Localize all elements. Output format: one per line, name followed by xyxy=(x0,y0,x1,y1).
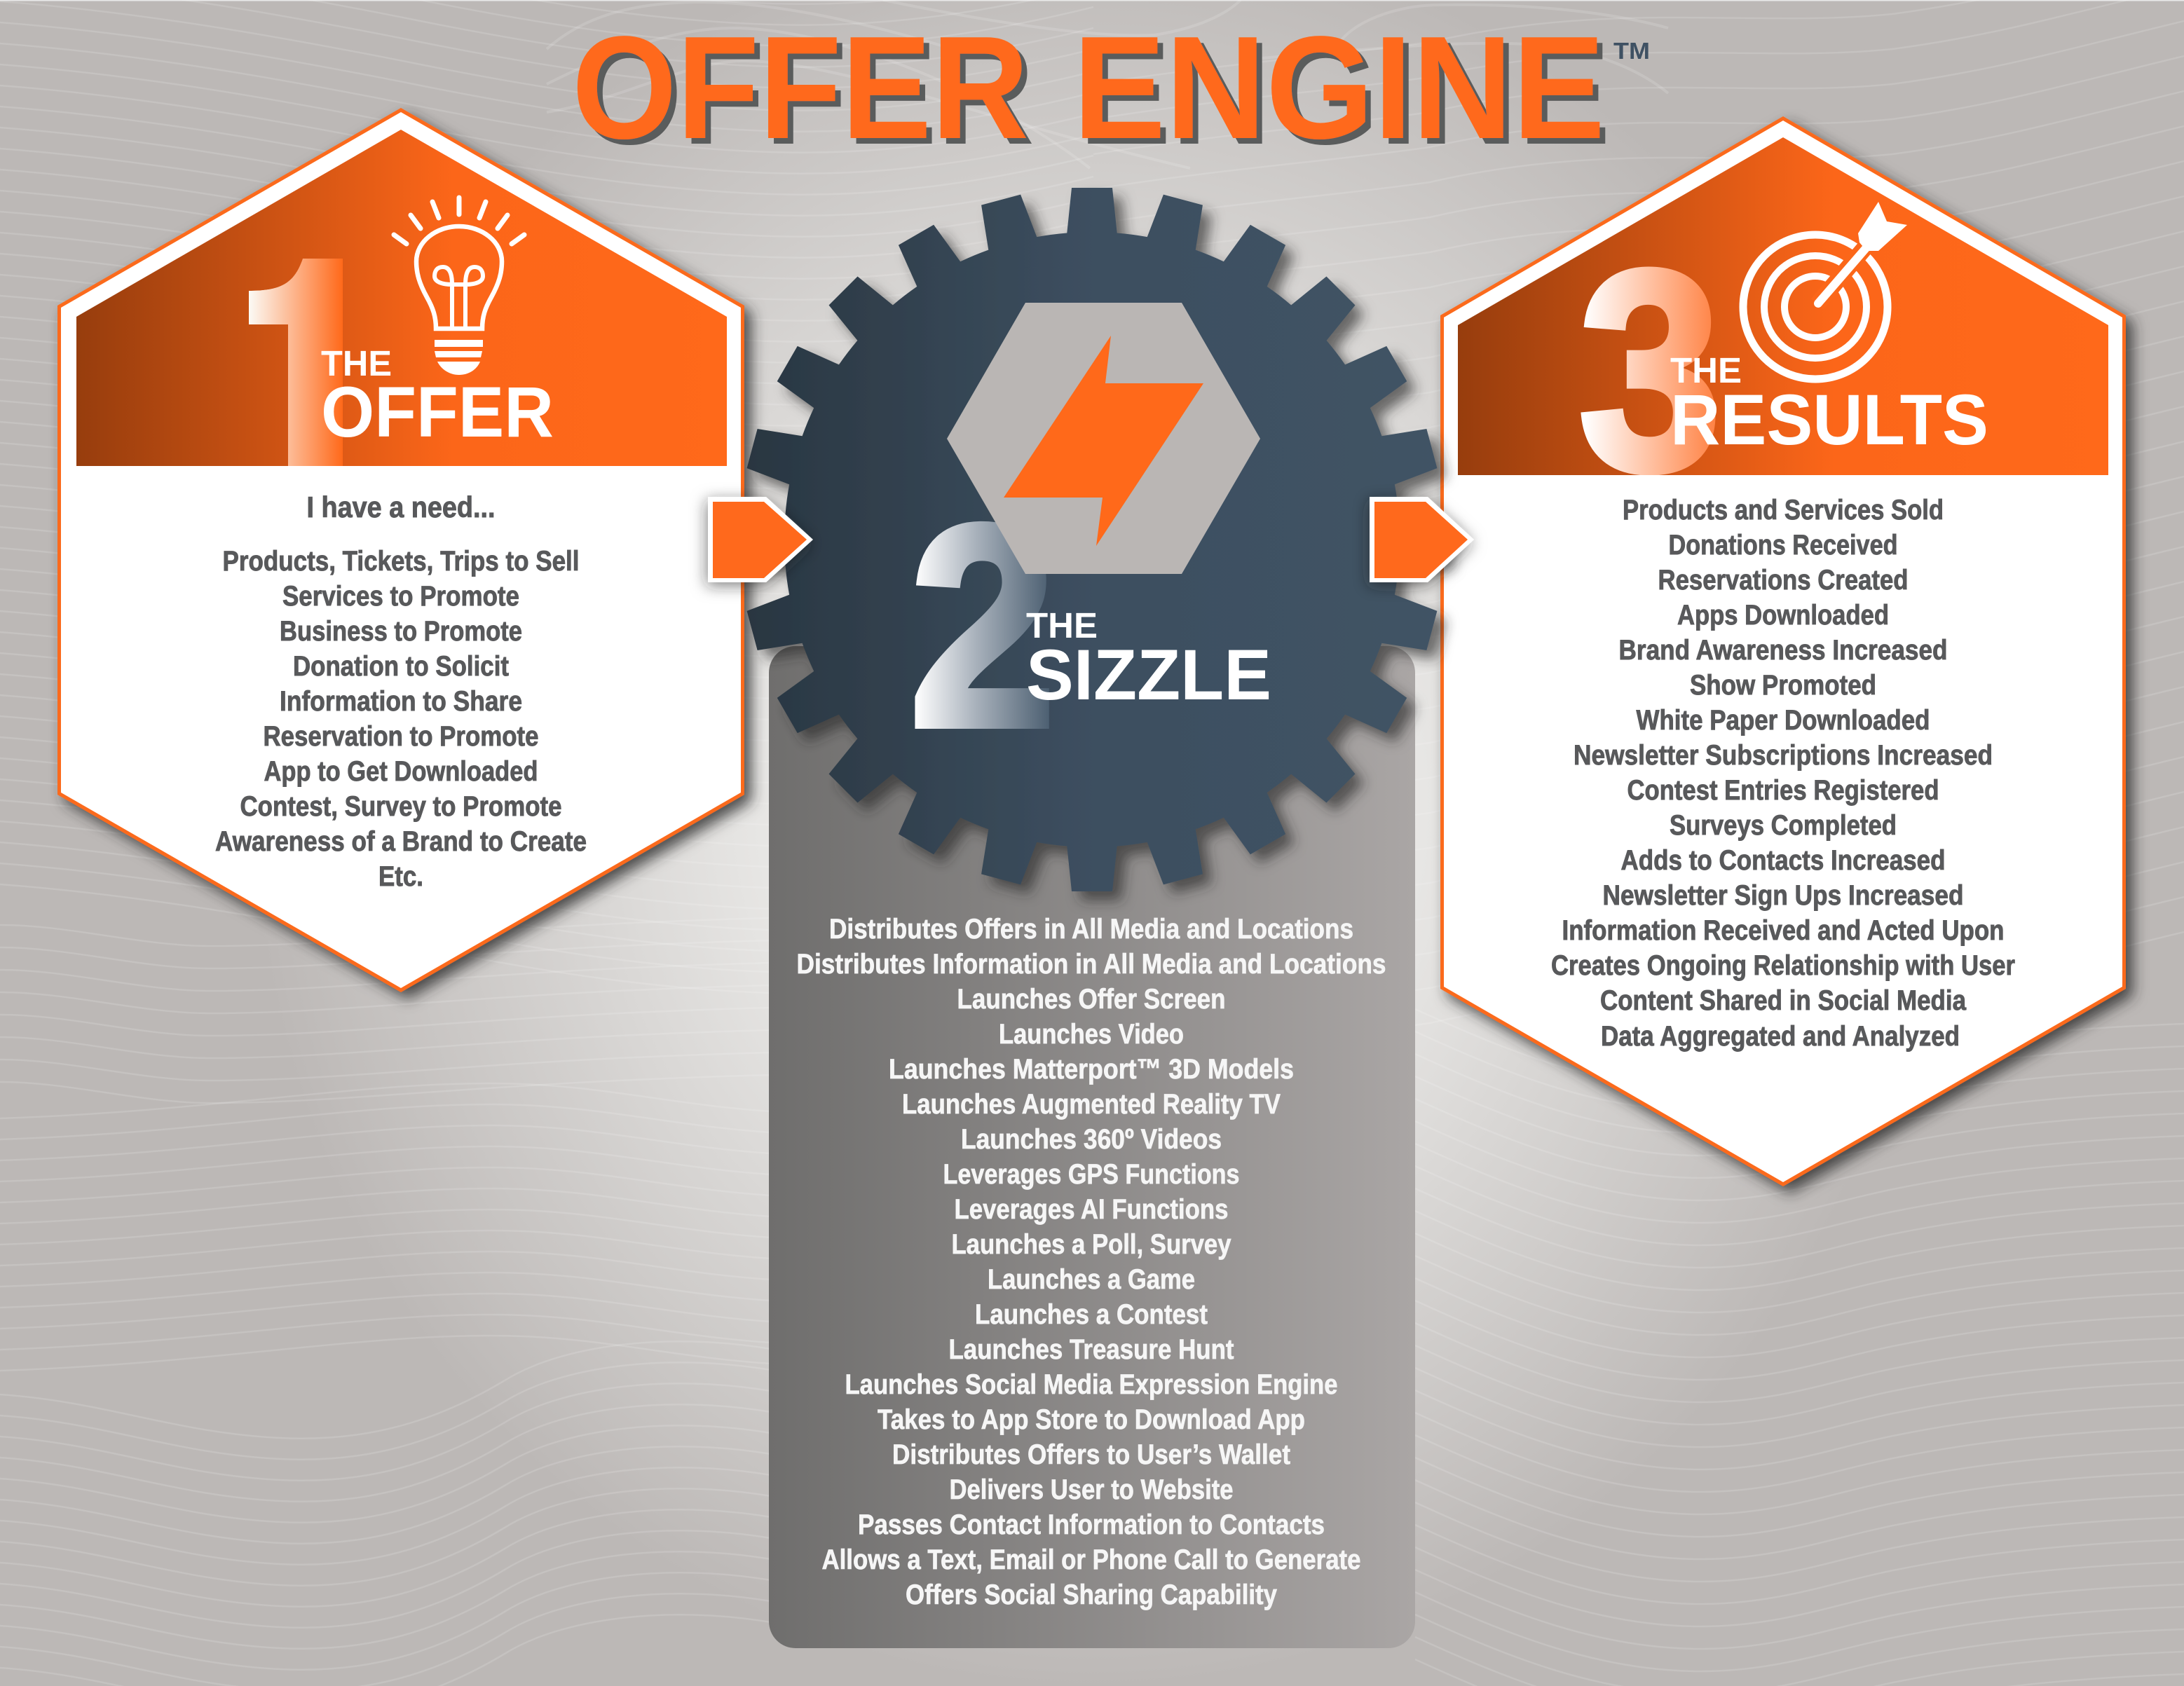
panel: hexagon 1 the offer xyxy=(57,108,744,992)
numeral 2: 2 xyxy=(910,467,1056,785)
text block: offer list: I have a need... xyxy=(307,491,495,523)
text block: offer list: Services to Promote xyxy=(282,581,519,612)
text block: sizzle list xyxy=(796,914,1386,1610)
panel: hexagon 3 the results xyxy=(1440,116,2126,1186)
arrow: sizzle to results xyxy=(1370,497,1474,582)
numeral 1: 1 xyxy=(224,198,388,529)
text block: results list: Newsletter Subscriptions Increased xyxy=(1574,740,1993,771)
text block: sizzle list: Takes to App Store to Download App xyxy=(878,1404,1305,1435)
text block: offer list: App to Get Downloaded xyxy=(264,756,538,787)
text block: sizzle list: Leverages GPS Functions xyxy=(943,1159,1239,1190)
arrow: offer to sizzle xyxy=(708,497,813,582)
gear xyxy=(729,175,1458,904)
icon: hexagon with lightning bolt xyxy=(947,303,1260,574)
heading: the sizzle: SIZZLE xyxy=(1026,635,1271,715)
text block: sizzle list: Launches Treasure Hunt xyxy=(949,1334,1234,1365)
text block: sizzle list: Leverages AI Functions xyxy=(955,1194,1228,1225)
text block: sizzle list: Launches Video xyxy=(999,1019,1184,1050)
title xyxy=(572,6,1605,170)
hexagon 3 orange header xyxy=(1458,137,2108,475)
text block: results list: Apps Downloaded xyxy=(1677,600,1889,631)
icon: light bulb xyxy=(394,198,524,375)
text block: results list: Donations Received xyxy=(1668,530,1898,561)
numeral 3: 3 xyxy=(1578,212,1721,530)
text block: offer list: Business to Promote xyxy=(280,616,522,647)
text block: results list: Brand Awareness Increased xyxy=(1619,635,1947,666)
panel: center sizzle list background xyxy=(769,646,1415,1648)
text block: results list: Reservations Created xyxy=(1658,565,1908,596)
text block: results list: Adds to Contacts Increased xyxy=(1620,845,1946,876)
text block: results list: Newsletter Sign Ups Increased xyxy=(1602,880,1964,911)
text block: offer list: Donation to Solicit xyxy=(293,651,509,682)
text block: results list: Creates Ongoing Relationship with User xyxy=(1551,950,2015,981)
hexagon 1 orange header xyxy=(76,130,727,466)
text block: sizzle list: Distributes Offers in All Media and Locations xyxy=(829,914,1353,945)
title: OFFER xyxy=(572,6,1029,170)
text block: sizzle list: Launches Matterport™ 3D Models xyxy=(889,1054,1294,1085)
text block: sizzle list: Launches Augmented Reality TV xyxy=(902,1089,1281,1120)
title: ENGINE xyxy=(1073,6,1605,170)
text block: results list: Data Aggregated and Analyzed xyxy=(1601,1021,1960,1052)
heading: the sizzle: THE xyxy=(1026,605,1098,645)
text block: sizzle list: Launches 360º Videos xyxy=(961,1124,1222,1155)
text block: sizzle list: Distributes Information in All Media and Locations xyxy=(796,949,1386,980)
text block: sizzle list: Allows a Text, Email or Phone Call to Generate xyxy=(821,1544,1361,1575)
text block: offer list: Information to Share xyxy=(280,686,522,717)
hexagon 1 frame xyxy=(57,108,744,992)
text block: sizzle list: Delivers User to Website xyxy=(949,1474,1234,1505)
text block: sizzle list: Launches a Contest xyxy=(975,1299,1208,1330)
text block: offer list: Contest, Survey to Promote xyxy=(240,791,562,822)
text block: sizzle list: Launches Offer Screen xyxy=(957,984,1225,1015)
heading: the offer: OFFER xyxy=(321,372,554,452)
heading: the results: RESULTS xyxy=(1670,380,1988,460)
text block: results list: Products and Services Sold xyxy=(1623,495,1944,526)
text block: results list: Information Received and Acted Upon xyxy=(1562,915,2005,946)
text block: results list: Surveys Completed xyxy=(1670,810,1897,841)
trademark symbol: TM xyxy=(1613,38,1650,64)
text block: sizzle list: Launches a Poll, Survey xyxy=(952,1229,1231,1260)
text block: results list: Content Shared in Social Media xyxy=(1600,985,1967,1016)
text block: results list: Show Promoted xyxy=(1690,670,1876,701)
text block: sizzle list: Launches Social Media Expression Engine xyxy=(845,1369,1337,1400)
text block: results list: Contest Entries Registered xyxy=(1627,775,1939,806)
text block: sizzle list: Passes Contact Information to Contacts xyxy=(858,1509,1325,1540)
text block: results list xyxy=(1551,495,2015,1052)
text block: results list: White Paper Downloaded xyxy=(1636,705,1930,736)
text block: offer list: Awareness of a Brand to Create xyxy=(215,826,587,857)
text block: sizzle list: Offers Social Sharing Capability xyxy=(906,1579,1278,1610)
text block: sizzle list: Distributes Offers to User’s Wallet xyxy=(892,1439,1290,1470)
heading: the results: THE xyxy=(1670,350,1742,390)
text block: sizzle list: Launches a Game xyxy=(988,1264,1195,1295)
heading: the offer: THE xyxy=(321,343,392,383)
icon: target with arrow xyxy=(1743,202,1907,379)
text block: offer list: Etc. xyxy=(378,861,423,892)
text block: offer list: Reservation to Promote xyxy=(264,721,538,752)
text block: offer list xyxy=(215,491,587,892)
hexagon 3 frame xyxy=(1440,116,2126,1186)
text block: offer list: Products, Tickets, Trips to Sell xyxy=(223,546,579,577)
